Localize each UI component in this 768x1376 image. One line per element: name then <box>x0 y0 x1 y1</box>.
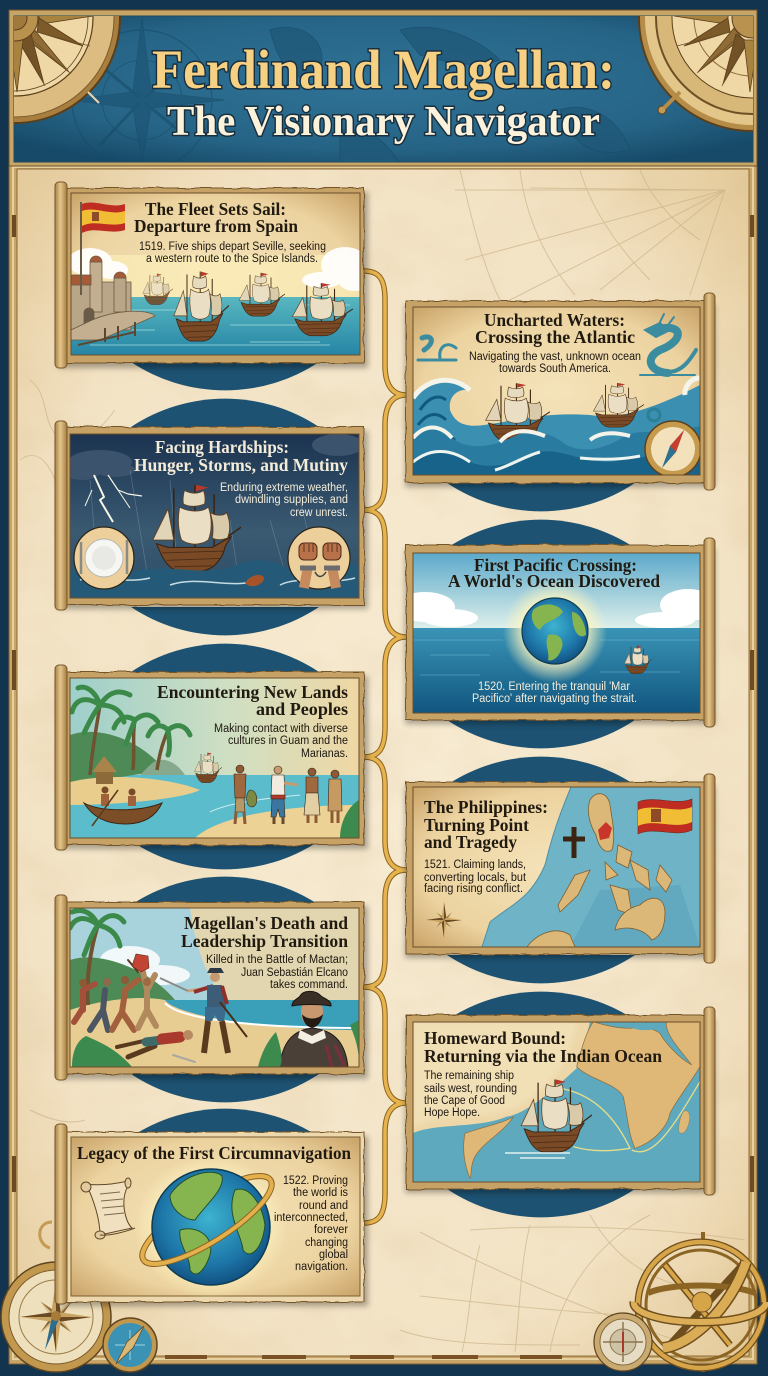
illustration: returning ship <box>521 1080 592 1152</box>
heading: A World's Ocean Discovered <box>448 571 660 591</box>
text: navigation. <box>295 1261 348 1273</box>
icon: Spanish flag <box>638 799 692 834</box>
illustration: fighting warriors <box>74 960 156 1030</box>
icon: cross <box>563 827 585 858</box>
heading <box>424 1028 662 1066</box>
text: the world is <box>293 1187 348 1199</box>
icon: Spanish flag <box>81 202 125 295</box>
illustration: dugout boat <box>84 786 162 826</box>
panel: the philippines <box>405 774 715 963</box>
text: Navigating the vast, unknown ocean <box>469 351 641 363</box>
heading: Magellan's Death and <box>184 913 348 933</box>
illustration: figures on the beach <box>234 765 342 824</box>
text <box>274 1175 348 1273</box>
text: dwindling supplies, and <box>235 494 348 506</box>
timeline connectors <box>364 271 406 1223</box>
illustration: portrait of Elcano <box>280 991 348 1067</box>
text: Making contact with diverse <box>214 723 348 735</box>
heading <box>181 913 348 951</box>
heading: The Fleet Sets Sail: <box>145 199 286 219</box>
illustration: ships <box>143 271 353 341</box>
text <box>424 1070 517 1119</box>
text <box>206 954 348 991</box>
text: the Cape of Good <box>424 1095 505 1107</box>
text: round and <box>299 1200 348 1212</box>
navy disc segments behind panels <box>131 362 635 1217</box>
illustration: hut <box>92 756 117 784</box>
text: converting locals, but <box>424 872 527 884</box>
panel: Magellan's death <box>55 895 368 1080</box>
text: 1522. Proving <box>283 1175 348 1187</box>
heading <box>448 555 660 591</box>
text: Hope Hope. <box>424 1107 480 1119</box>
compass: top right <box>638 16 753 132</box>
text: forever <box>314 1224 348 1236</box>
title <box>152 39 615 145</box>
text: crew unrest. <box>290 507 348 519</box>
icon: compass <box>645 409 701 477</box>
text: The remaining ship <box>424 1070 514 1082</box>
panel: homeward bound <box>405 1007 715 1195</box>
illustration: globe with ring <box>132 1155 287 1299</box>
text: sails west, rounding <box>424 1083 517 1095</box>
heading <box>424 797 548 852</box>
text: Pacifico' after navigating the strait. <box>472 693 637 705</box>
heading: Legacy of the First Circumnavigation <box>77 1143 351 1163</box>
text: Enduring extreme weather, <box>220 482 348 494</box>
text: 1519. Five ships depart Seville, seeking <box>139 241 326 253</box>
illustration: commander with sword <box>160 968 247 1053</box>
header faint compass rose <box>72 18 224 156</box>
illustration: palm trees <box>72 687 190 775</box>
corner: bottom right armillary sphere <box>594 1232 766 1372</box>
illustration: sailing ship <box>194 753 222 783</box>
title: Ferdinand Magellan: <box>152 39 615 100</box>
heading: Crossing the Atlantic <box>475 327 635 347</box>
compass: top left <box>14 16 121 124</box>
panel: encountering new lands <box>55 665 368 850</box>
heading: Turning Point <box>424 815 529 835</box>
illustration: palm tree <box>70 911 124 1005</box>
text <box>424 859 527 895</box>
illustration: ship in the storm <box>153 485 241 571</box>
title: The Visionary Navigator <box>167 99 600 145</box>
text: a western route to the Spice Islands. <box>146 253 318 265</box>
heading: Hunger, Storms, and Mutiny <box>134 455 348 475</box>
text: Juan Sebastián Elcano <box>241 967 348 979</box>
heading: Uncharted Waters: <box>484 310 625 330</box>
text <box>214 723 348 760</box>
illustration: big waves <box>414 376 700 450</box>
icon: chained fists <box>288 527 350 589</box>
icon: compass rose <box>426 902 462 938</box>
heading <box>475 310 635 347</box>
text <box>139 241 326 265</box>
text: 1520. Entering the tranquil 'Mar <box>478 681 630 693</box>
text <box>220 482 348 519</box>
illustration: harbor city <box>71 256 155 340</box>
heading: Facing Hardships: <box>155 437 289 457</box>
heading: Departure from Spain <box>134 216 298 236</box>
panel: uncharted waters <box>405 293 715 490</box>
heading <box>134 199 298 236</box>
icon: plate <box>74 527 134 589</box>
text: takes command. <box>270 979 348 991</box>
text: interconnected, <box>274 1212 348 1224</box>
text: cultures in Guam and the <box>228 735 348 747</box>
text: facing rising conflict. <box>424 883 523 895</box>
illustration: sea serpents <box>418 314 696 375</box>
heading: and Tragedy <box>424 832 517 852</box>
heading: Returning via the Indian Ocean <box>424 1046 662 1066</box>
heading: and Peoples <box>256 699 348 719</box>
heading: First Pacific Crossing: <box>474 555 637 575</box>
corner: bottom left compasses <box>1 1222 157 1372</box>
heading <box>134 437 348 475</box>
panel: legacy <box>55 1124 368 1306</box>
icon: lightning <box>85 475 142 522</box>
heading: Leadership Transition <box>181 931 348 951</box>
heading <box>157 682 348 719</box>
illustration: map of the Philippines <box>482 787 700 947</box>
panel: facing hardships <box>55 421 368 610</box>
heading: Homeward Bound: <box>424 1028 566 1048</box>
panel: the fleet sets sail <box>55 182 371 368</box>
illustration: small ship <box>624 646 652 674</box>
text: 1521. Claiming lands, <box>424 859 526 871</box>
illustration: globe <box>503 579 607 683</box>
text: changing <box>305 1237 348 1249</box>
text <box>472 681 637 705</box>
text: Marianas. <box>301 748 348 760</box>
icon: scroll <box>81 1178 135 1239</box>
header faint world map <box>270 27 630 165</box>
heading: Encountering New Lands <box>157 682 348 702</box>
heading: The Philippines: <box>424 797 548 817</box>
illustration: fallen figure <box>117 1037 195 1062</box>
header banner <box>0 0 768 170</box>
text: Killed in the Battle of Mactan; <box>206 954 348 966</box>
text <box>469 351 641 375</box>
text: global <box>319 1249 348 1261</box>
text: towards South America. <box>499 363 611 375</box>
panel: first pacific crossing <box>395 538 716 727</box>
